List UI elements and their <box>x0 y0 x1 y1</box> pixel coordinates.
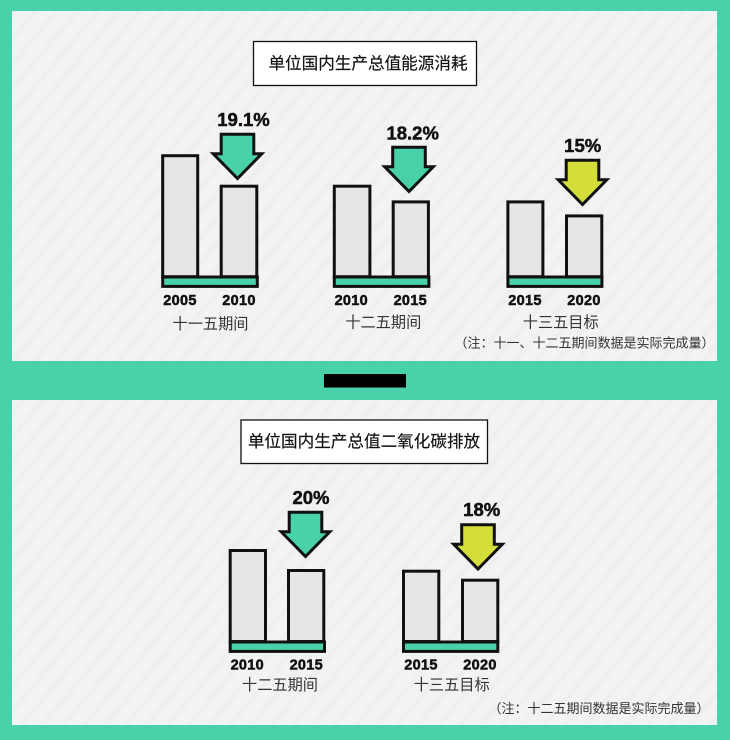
year labels: 2005 <box>163 293 197 309</box>
value: 18.2%: 18.2% <box>386 122 439 143</box>
chart: 13th five-year target <box>404 499 502 694</box>
arrow: down 18.2% <box>385 147 433 192</box>
heading: carbon emissions <box>241 420 488 464</box>
year labels: 2010 <box>231 657 264 673</box>
year labels: 2015 <box>404 657 438 673</box>
redaction bar <box>324 374 406 388</box>
year labels <box>231 657 323 673</box>
value: 20%: 20% <box>292 487 330 508</box>
year labels: 2010 <box>222 293 256 309</box>
period label: 十一五期间 <box>173 316 248 333</box>
value: 18%: 18% <box>463 499 500 520</box>
chart: 11th five-year period <box>163 109 270 333</box>
panel: carbon emissions <box>12 400 717 725</box>
heading: carbon emissions: 单位国内生产总值二氧化碳排放 <box>248 432 481 451</box>
year labels: 2020 <box>567 293 601 309</box>
period label: 十二五期间 <box>345 314 421 332</box>
heading: energy consumption <box>254 42 476 86</box>
year labels <box>508 293 601 309</box>
year labels <box>335 293 427 309</box>
arrow: down 20% <box>281 512 330 556</box>
arrow: down 15% <box>558 160 607 204</box>
note: （注：十一、十二五期间数据是实际完成量） <box>454 336 715 350</box>
period label: 十三五目标 <box>414 677 490 694</box>
year labels: 2015 <box>290 657 323 673</box>
year labels: 2010 <box>335 293 368 309</box>
year labels: 2015 <box>394 293 427 309</box>
year labels: 2015 <box>508 293 542 309</box>
period label: 十二五期间 <box>242 677 318 694</box>
year labels <box>404 657 497 673</box>
panel: energy consumption <box>12 11 717 361</box>
year labels: 2020 <box>463 657 497 673</box>
chart: 12th five-year period <box>230 487 330 694</box>
year labels <box>163 293 256 309</box>
arrow: down 19.1% <box>213 134 262 178</box>
period label: 十三五目标 <box>523 314 599 332</box>
value: 19.1%: 19.1% <box>217 109 270 130</box>
value: 15%: 15% <box>564 135 601 156</box>
note: （注：十二五期间数据是实际完成量） <box>488 701 710 716</box>
chart: 12th five-year period <box>334 122 439 332</box>
heading: energy consumption: 单位国内生产总值能源消耗 <box>268 54 468 73</box>
chart: 13th five-year target <box>508 135 607 332</box>
arrow: down 18% <box>454 525 502 569</box>
